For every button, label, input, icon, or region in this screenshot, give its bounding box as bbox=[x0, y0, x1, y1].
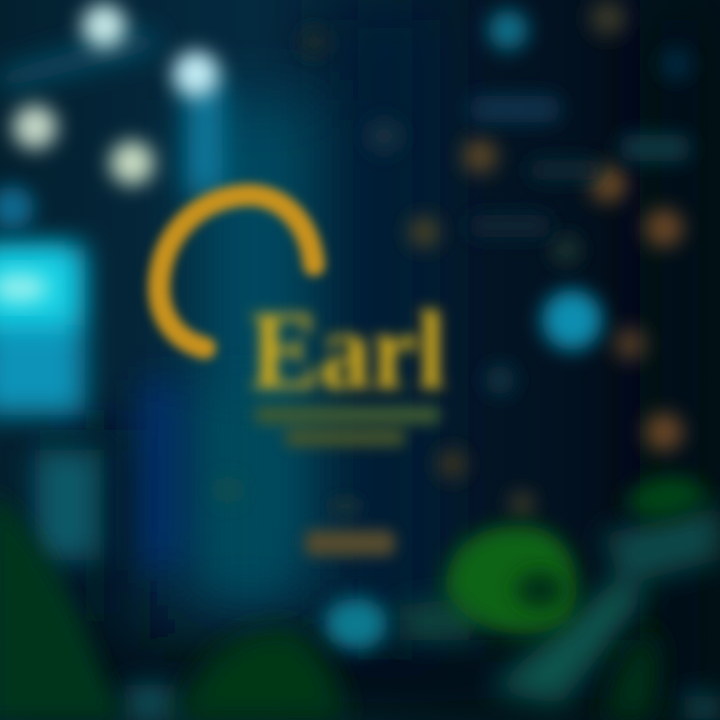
white lights bbox=[13, 4, 219, 185]
green foliage bbox=[0, 477, 708, 720]
gold ring bbox=[159, 195, 314, 348]
subtitle bbox=[255, 406, 440, 446]
faint text bars bbox=[470, 96, 690, 237]
light beams bbox=[0, 28, 222, 560]
cyan orb bbox=[542, 290, 602, 350]
scattered dots bbox=[216, 0, 692, 515]
small caption bbox=[305, 498, 395, 556]
teal spot bbox=[324, 598, 388, 650]
teal leaves bbox=[125, 505, 720, 720]
title: gold wordmark: Earl bbox=[250, 289, 446, 413]
bright cyan panel bbox=[0, 186, 85, 415]
